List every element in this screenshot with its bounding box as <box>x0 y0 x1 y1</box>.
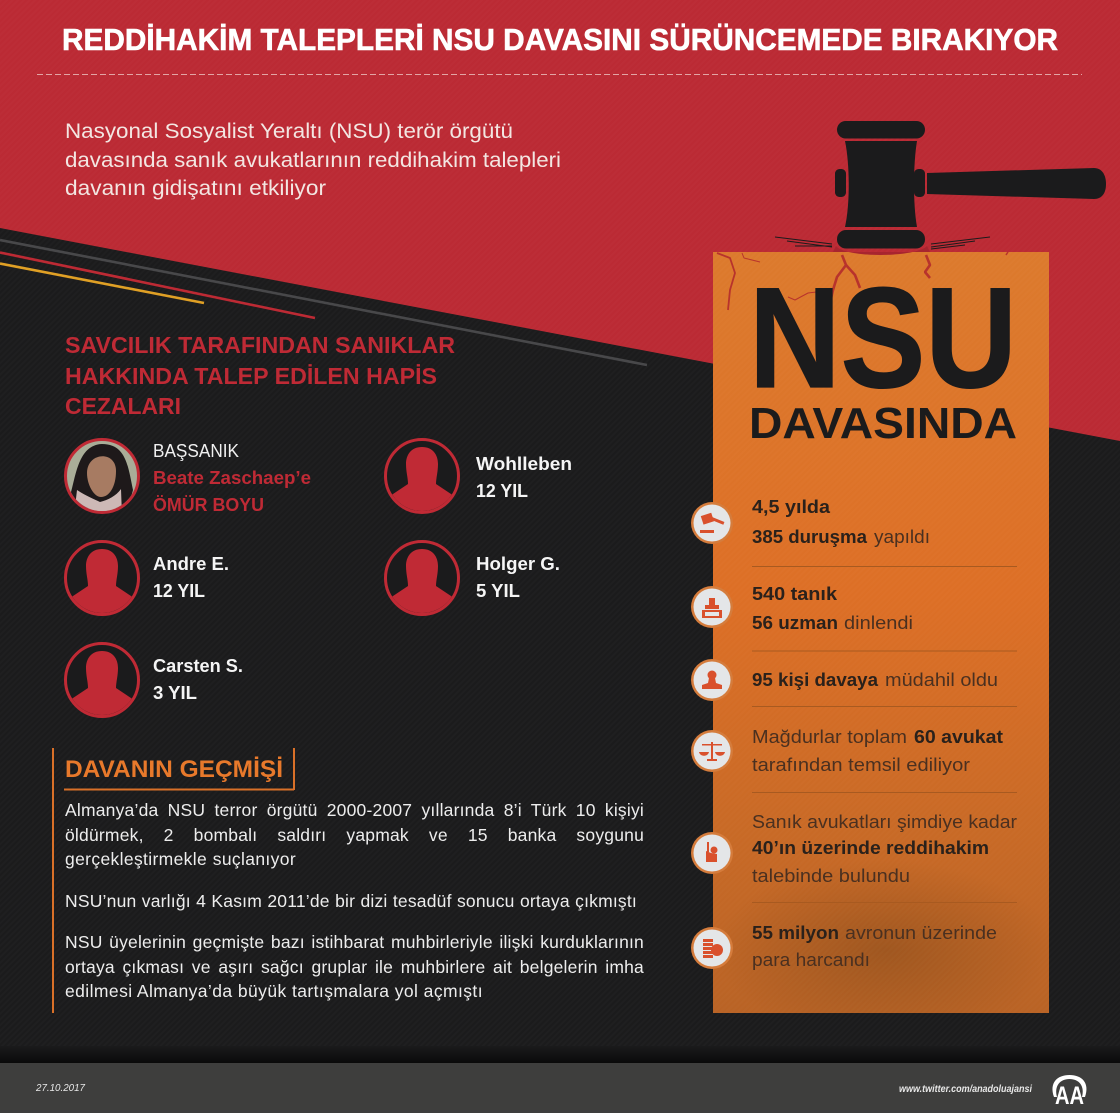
panel: NSU orange column <box>713 252 1055 1040</box>
text: history paragraph 1: Almanya’da NSU terror örgütü 2000-2007 yıllarında 8’i Türk 10 kişiyi <box>65 800 644 820</box>
text: history paragraph 3: NSU üyelerinin geçmişte bazı istihbarat muhbirleriyle ilişki kurduklarının <box>65 932 644 952</box>
logo: AA <box>1052 1075 1087 1110</box>
stat: cost: avronun üzerinde <box>845 923 997 943</box>
defendant icon: Carsten S. <box>66 644 138 720</box>
stat: hearings <box>752 497 930 547</box>
intro text: Nasyonal Sosyalist Yeraltı (NSU) terör örgütü <box>65 120 513 143</box>
stat: recusals: 40’ın üzerinde reddihakim <box>752 838 989 858</box>
text: history paragraph 1: öldürmek, 2 bombalı saldırı yapmak ve 15 banka soygunu <box>65 825 644 845</box>
icon: person badge <box>691 659 733 701</box>
defendant text: Andre E.: Andre E. <box>153 554 229 574</box>
defendant text: Carsten S. <box>153 656 243 703</box>
text: history paragraph 1 <box>65 800 644 869</box>
stat: cost <box>752 923 997 970</box>
defendant icon: Andre E. <box>66 542 138 618</box>
icon: money badge <box>691 927 733 969</box>
defendant text: Wohlleben <box>476 454 572 501</box>
defendant icon: Wohlleben <box>386 440 458 516</box>
stat: lawyers: tarafından temsil ediliyor <box>752 755 970 775</box>
defendant text: Beate Zschaepe: ÖMÜR BOYU <box>153 495 264 515</box>
defendant: Beate Zschaepe photo <box>66 440 138 516</box>
stat: lawyers: 60 avukat <box>914 727 1003 747</box>
stat: witnesses: dinlendi <box>844 613 913 633</box>
stat: interveners: 95 kişi davaya <box>752 670 879 690</box>
footer band <box>0 1063 1120 1113</box>
heading: DAVASINDA: DAVASINDA <box>749 399 1017 448</box>
stat: cost: para harcandı <box>752 950 870 970</box>
defendant text: Holger G. <box>476 554 560 601</box>
text: history paragraph 3 <box>65 932 644 1001</box>
stat: witnesses: 540 tanık <box>752 584 838 604</box>
heading: requested sentences: HAKKINDA TALEP EDİLEN HAPİS <box>65 363 437 389</box>
defendant text: Holger G.: 5 YIL <box>476 581 520 601</box>
icon: gavel badge <box>691 502 733 544</box>
text: history paragraph 3: edilmesi Almanya’da büyük tartışmalara yol açmıştı <box>65 981 483 1001</box>
text: history paragraph 3: ortaya çıkması ve aşırı sağcı gruplar ile muhbirlere ait belgelerin imha <box>65 957 644 977</box>
defendant text: Beate Zschaepe: BAŞSANIK <box>153 441 239 461</box>
text: history paragraph 1: gerçekleştirmekle suçlanıyor <box>65 849 296 869</box>
defendant text: Andre E. <box>153 554 229 601</box>
intro text <box>65 120 561 200</box>
heading: case history: DAVANIN GEÇMİŞİ <box>65 756 283 783</box>
defendant text: Holger G.: Holger G. <box>476 554 560 574</box>
stat: recusals: Sanık avukatları şimdiye kadar <box>752 812 1017 832</box>
defendant text: Beate Zschaepe <box>153 441 311 515</box>
history frame <box>53 748 294 1013</box>
stat: recusals <box>752 812 1017 886</box>
defendant text: Andre E.: 12 YIL <box>153 581 205 601</box>
stat: interveners <box>752 670 998 690</box>
stat: lawyers <box>752 727 1003 775</box>
black background wedge <box>0 228 1120 1113</box>
stat: lawyers: Mağdurlar toplam <box>752 727 907 747</box>
cracks <box>717 252 1008 310</box>
stat: witnesses <box>752 584 913 633</box>
stat: hearings: 4,5 yılda <box>752 497 831 517</box>
stat: hearings: 385 duruşma <box>752 527 868 547</box>
stat dividers <box>752 566 1017 902</box>
diagonal accent stripes <box>0 240 647 365</box>
stat: recusals: talebinde bulundu <box>752 866 910 886</box>
defendant text: Wohlleben: 12 YIL <box>476 481 528 501</box>
stat: cost: 55 milyon <box>752 923 839 943</box>
stat: interveners: müdahil oldu <box>885 670 998 690</box>
title: REDDİHAKİM TALEPLERİ NSU DAVASINI SÜRÜNCEMEDE BIRAKIYOR <box>62 22 1058 57</box>
icon: stamp badge <box>691 586 733 628</box>
icon: lawyer badge <box>691 832 733 874</box>
stat: hearings: yapıldı <box>874 527 930 547</box>
intro text: davasında sanık avukatlarının reddihakim talepleri <box>65 149 561 172</box>
defendant text: Carsten S.: 3 YIL <box>153 683 197 703</box>
footer date: 27.10.2017 <box>35 1083 85 1094</box>
footer link: www.twitter.com/anadoluajansi <box>899 1084 1032 1095</box>
heading: requested sentences: CEZALARI <box>65 393 181 419</box>
stat: witnesses: 56 uzman <box>752 613 838 633</box>
text: history paragraph 2: NSU’nun varlığı 4 Kasım 2011’de bir dizi tesadüf sonucu ortaya çıkmıştı <box>65 891 637 911</box>
defendant text: Beate Zschaepe: Beate Zaschaep’e <box>153 468 311 488</box>
defendant icon: Holger G. <box>386 542 458 618</box>
heading: NSU: NSU <box>749 259 1017 418</box>
heading: requested sentences <box>65 332 455 419</box>
defendant text: Wohlleben: Wohlleben <box>476 454 572 474</box>
logo: AA: AA <box>1055 1082 1084 1110</box>
icon: gavel <box>775 121 1106 255</box>
icon: scales badge <box>691 730 733 772</box>
defendant text: Carsten S.: Carsten S. <box>153 656 243 676</box>
intro text: davanın gidişatını etkiliyor <box>65 177 326 200</box>
heading: requested sentences: SAVCILIK TARAFINDAN SANIKLAR <box>65 332 455 358</box>
